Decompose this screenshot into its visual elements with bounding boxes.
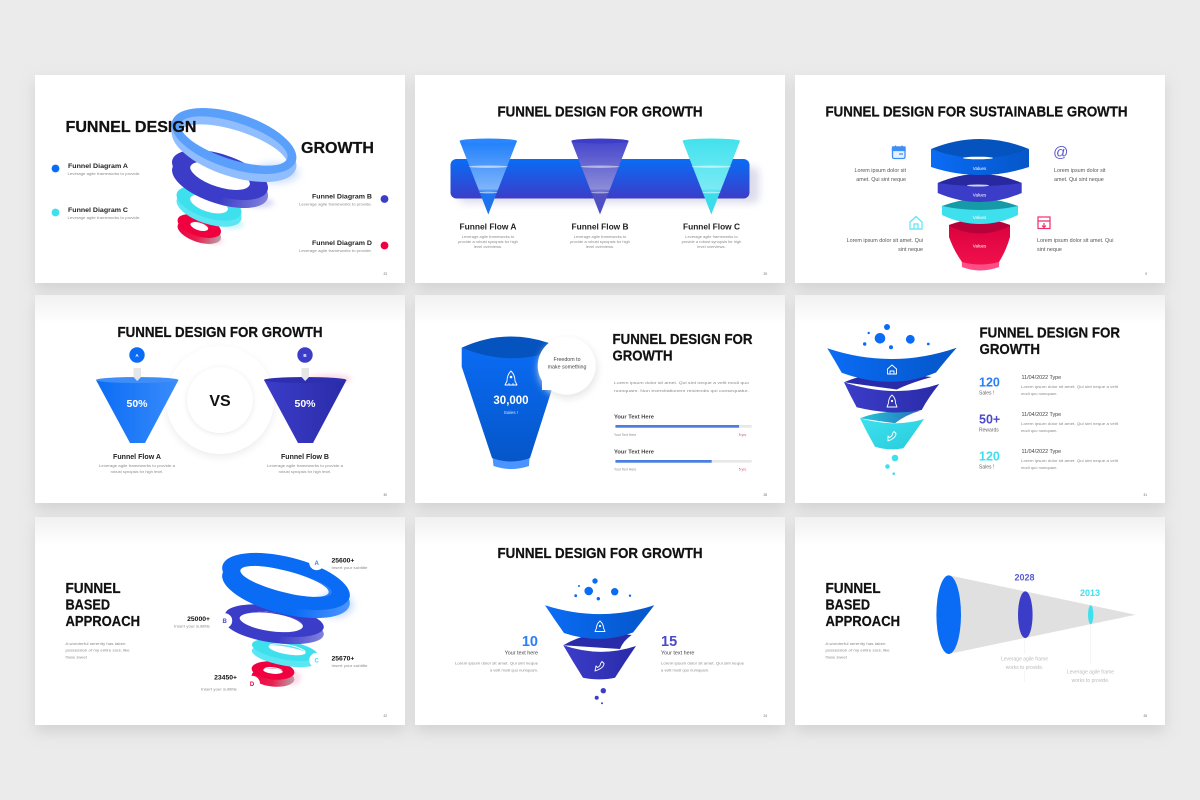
text: top right: amet. Qui sint neque — [1054, 177, 1104, 183]
label: 23450+: 23450+ — [214, 675, 237, 682]
heading: GROWTH — [980, 341, 1040, 358]
paragraph: possession of my entire soul, like — [826, 648, 890, 653]
stat detail 1: 11/04/2022 Type — [1022, 375, 1061, 381]
stat: 120 sales: 120 — [979, 376, 1000, 390]
label: 25670+ — [332, 655, 368, 668]
label: Funnel Flow C: provide a robust synopsis for high — [682, 239, 741, 244]
legend: Funnel Diagram D: Leverage agile frameworks to provide. — [299, 248, 372, 253]
paragraph: these sweet — [826, 654, 848, 659]
panel: three cones on a bar — [415, 75, 785, 283]
heading: GROWTH — [612, 348, 672, 364]
label: Funnel Flow B: robust synopsis for high level. — [279, 469, 331, 474]
stat detail 3: Lorem ipsum dolor sit amet. Qui sint neque a velit — [1021, 458, 1119, 463]
badge B: B — [223, 619, 228, 625]
stat: 120 sales cyan: 120 — [979, 449, 1000, 463]
stat detail 2: modi quo numquam. — [1021, 428, 1057, 433]
ring: cyan — [171, 179, 247, 234]
label: Funnel Flow C: Funnel Flow C — [683, 222, 740, 232]
page number: 29 — [763, 272, 767, 276]
stat: 15: 15 — [661, 634, 677, 650]
label: Funnel Flow C — [682, 222, 741, 249]
paragraph — [66, 641, 130, 659]
stat detail 1: Lorem ipsum dolor sit amet. Qui sint neque a velit — [1021, 384, 1119, 389]
stat: 10: 10 — [522, 634, 538, 650]
label: 25600+: 25600+ — [332, 558, 354, 565]
stat: 50+ rewards: Rewards — [979, 428, 999, 434]
label: 25000+: 25000+ — [187, 616, 210, 623]
stat detail 2: Lorem ipsum dolor sit amet. Qui sint neque a velit — [1021, 421, 1119, 426]
stat detail 3 — [1021, 449, 1119, 470]
falling dots: top — [574, 578, 631, 600]
ring: indigo — [164, 140, 276, 218]
label: Funnel Flow A: Leverage agile frameworks to provide a — [99, 463, 176, 468]
legend: Funnel Diagram A: Funnel Diagram A — [68, 163, 128, 170]
text: bottom right: Lorem ipsum dolor sit amet. Qui — [1037, 238, 1113, 244]
label: Funnel Flow A — [99, 454, 176, 474]
text: bottom left — [847, 238, 923, 253]
label: Funnel Flow B: level overviews. — [586, 244, 614, 249]
funnel tier 3 — [860, 411, 924, 449]
text: bottom left: Lorem ipsum dolor sit amet. Qui — [847, 238, 923, 244]
label: Funnel Flow B: Leverage agile frameworks to provide a — [267, 463, 344, 468]
progress: second: Your Text Here — [614, 468, 636, 472]
paragraph: A wonderful serenity has taken — [826, 641, 886, 646]
legend: Funnel Diagram C: Leverage agile frameworks to provide. — [68, 215, 140, 220]
page number: 28 — [763, 493, 767, 497]
funnel tier 2 — [563, 632, 636, 679]
ellipse: indigo — [1018, 591, 1033, 638]
stat detail 3: 11/04/2022 Type — [1022, 449, 1061, 455]
progress: second — [614, 450, 752, 472]
stat: 120 sales — [979, 376, 1000, 397]
year 2028: 2028 — [1014, 573, 1035, 583]
icon: at sign: @ — [1053, 144, 1068, 161]
label: Funnel Flow A: Leverage agile frameworks to — [462, 234, 515, 239]
funnel with rocket and value — [462, 337, 555, 469]
badge C — [309, 653, 324, 668]
paragraph: A wonderful serenity has taken — [66, 641, 126, 646]
text: bottom right: sint neque — [1037, 247, 1062, 253]
badge A: A — [315, 561, 320, 567]
progress: second: 5 yrs. — [739, 468, 747, 472]
panel: horizontal cone timeline — [795, 517, 1165, 725]
paragraph: Lorem ipsum dolor sit amet. Qui sint neque a velit modi quo — [614, 380, 750, 385]
cone A — [460, 138, 517, 214]
label: Funnel Flow A: Funnel Flow A — [460, 222, 517, 232]
progress: first: Your Text Here — [614, 433, 636, 437]
speech bubble: Freedom to — [553, 357, 581, 363]
heading — [980, 324, 1120, 358]
stage 4: red — [949, 219, 1010, 270]
panel: two-tier funnel — [415, 517, 785, 725]
label: 23450+: Insert your subtitle — [201, 686, 238, 692]
stat: 10: a velit modi quo numquam. — [490, 667, 538, 672]
stat detail 1: modi quo numquam. — [1021, 391, 1057, 396]
panel: single funnel with progress bars — [415, 295, 785, 503]
stat detail 1 — [1021, 375, 1119, 396]
label: Funnel Flow A: level overviews. — [474, 244, 502, 249]
badge A — [309, 555, 324, 570]
stage 2: indigo — [938, 174, 1022, 202]
legend: Funnel Diagram B: Funnel Diagram B — [312, 194, 372, 200]
funnel tier 1 — [545, 605, 654, 639]
progress: first: Your Text Here — [614, 414, 654, 420]
label: Funnel Flow A: provide a robust synopsis for high — [458, 239, 518, 244]
stage 3: cyan — [942, 199, 1018, 224]
VS circles — [166, 346, 274, 457]
funnel with rocket and value: Sales ! — [504, 410, 518, 416]
label: 25670+: 25670+ — [332, 655, 354, 662]
legend: Funnel Diagram B — [299, 194, 388, 206]
label: Funnel Flow B — [570, 222, 630, 249]
progress: second: Your Text Here — [614, 450, 654, 456]
falling dots: top — [863, 324, 930, 349]
ring C cyan — [249, 635, 321, 671]
label: Funnel Flow B: Leverage agile frameworks to — [574, 234, 627, 239]
stat: 15: Your text here — [661, 651, 694, 657]
year 2013: 2013 — [1080, 588, 1100, 598]
label: 23450+ — [201, 675, 238, 692]
paragraph: possession of my entire soul, like — [66, 648, 130, 653]
stat: 50+ rewards: 50+ — [979, 412, 1000, 426]
text: top right: Lorem ipsum dolor sit — [1054, 168, 1106, 174]
funnel A: 50% — [126, 398, 148, 410]
funnel A — [96, 377, 178, 443]
page number: 24 — [763, 714, 767, 718]
heading part one: FUNNEL DESIGN — [66, 119, 196, 136]
legend: Funnel Diagram A — [52, 163, 140, 176]
background shadows under slides — [35, 80, 1165, 732]
speech bubble — [538, 337, 597, 398]
heading — [826, 580, 900, 630]
label: 25000+ — [174, 616, 211, 628]
stat: 120 sales cyan — [979, 449, 1000, 470]
panel: three-tier funnel with stats — [795, 295, 1165, 503]
heading part two: GROWTH — [301, 140, 374, 157]
panel: four-stage sustainable funnel — [795, 75, 1165, 283]
funnel with rocket and value: 30,000 — [493, 395, 529, 407]
progress: first — [614, 414, 752, 437]
text: top left: amet. Qui sint neque — [856, 177, 906, 183]
heading: APPROACH — [66, 613, 140, 630]
note: 2028: works to provide. — [1006, 665, 1043, 671]
text: bottom left: sint neque — [898, 247, 923, 253]
label: Funnel Flow C: level overviews. — [697, 244, 726, 249]
paragraph: numquam. Non exercitationem reiciendis qui consequatur. — [614, 388, 749, 393]
label: Funnel Flow B: Funnel Flow B — [572, 222, 629, 232]
heading: BASED — [826, 596, 870, 613]
text: top left: Lorem ipsum dolor sit — [854, 168, 907, 174]
note: 2028: Leverage agile frame — [1001, 657, 1048, 663]
stat detail 2 — [1021, 412, 1119, 433]
badge D: D — [250, 682, 255, 688]
page number: 22 — [383, 714, 387, 718]
note: 2013: Leverage agile frame — [1067, 670, 1114, 676]
stage 4: red: Values — [973, 244, 987, 248]
page number: 31 — [1143, 493, 1147, 497]
ring A blue — [215, 542, 357, 629]
icon: house — [910, 216, 922, 229]
icon: calendar — [892, 146, 905, 158]
badge D — [244, 676, 260, 692]
grey cone — [949, 575, 1136, 654]
page number: 9 — [1145, 272, 1147, 276]
page number: 30 — [383, 493, 387, 497]
label: Funnel Flow B: provide a robust synopsis for high — [570, 239, 630, 244]
heading: FUNNEL DESIGN FOR GROWTH — [118, 324, 322, 341]
heading: FUNNEL — [66, 580, 120, 597]
label: 25670+: Insert your subtitle — [332, 663, 368, 668]
note: 2013: works to provide. — [1072, 678, 1109, 684]
stage 1: blue — [931, 139, 1029, 175]
badge A with pointer: A — [135, 353, 139, 358]
badge C: C — [315, 659, 320, 665]
stage 3: cyan: Values — [973, 215, 987, 220]
falling dots: bottom — [885, 455, 898, 475]
progress: first: 5 yrs. — [739, 433, 747, 437]
paragraph — [614, 380, 750, 393]
icon: box — [1038, 217, 1050, 228]
stat: 50+ rewards — [979, 412, 1000, 434]
stage 2: indigo: Values — [973, 192, 987, 198]
stat: 10 — [455, 634, 539, 672]
label: 25600+ — [332, 558, 368, 570]
heading: FUNNEL DESIGN FOR — [612, 331, 753, 348]
note: 2013 — [1067, 670, 1114, 684]
note: 2028 — [995, 654, 1055, 671]
paragraph: these sweet — [66, 654, 88, 659]
legend: Funnel Diagram C: Funnel Diagram C — [68, 207, 128, 214]
stat: 120 sales cyan: Sales ! — [979, 464, 994, 470]
paragraph — [826, 641, 890, 659]
stat detail 2: 11/04/2022 Type — [1022, 412, 1061, 418]
stage 1: blue: Values — [973, 166, 987, 171]
cone B — [571, 138, 629, 214]
speech bubble: make something — [548, 364, 586, 370]
text: top left — [854, 168, 907, 183]
text: top right — [1054, 168, 1106, 183]
VS circles: VS — [209, 393, 231, 410]
legend: Funnel Diagram D — [299, 240, 388, 253]
heading: FUNNEL DESIGN FOR GROWTH — [498, 545, 702, 562]
heading: APPROACH — [826, 613, 900, 630]
ring B indigo — [222, 599, 327, 650]
heading: BASED — [66, 596, 110, 613]
legend: Funnel Diagram B: Leverage agile frameworks to provide. — [299, 202, 372, 206]
ring: light blue — [161, 95, 307, 195]
heading: FUNNEL DESIGN FOR SUSTAINABLE GROWTH — [826, 104, 1128, 120]
label: Funnel Flow B — [267, 454, 344, 474]
panel: ring funnel approach — [35, 517, 405, 725]
panel: versus comparison — [35, 295, 405, 503]
heading: FUNNEL DESIGN FOR GROWTH — [498, 104, 702, 120]
panel: ring funnel with four diagrams — [35, 75, 405, 283]
heading — [66, 580, 140, 630]
page number: 26 — [1143, 714, 1147, 718]
legend: Funnel Diagram D: Funnel Diagram D — [312, 240, 372, 247]
ellipse: blue — [936, 575, 961, 654]
stat: 15: a velit modi quo numquam. — [661, 667, 709, 672]
heading: FUNNEL DESIGN FOR — [980, 324, 1120, 341]
label: Funnel Flow C: Leverage agile frameworks to — [685, 234, 739, 239]
heading: FUNNEL — [826, 580, 880, 597]
ellipse: cyan — [1088, 605, 1093, 624]
stat: 15: Lorem ipsum dolor sit amet. Qui sint neque — [661, 660, 745, 666]
heading — [612, 331, 753, 364]
legend: Funnel Diagram C — [52, 207, 140, 220]
stat: 10: Lorem ipsum dolor sit amet. Qui sint neque — [455, 660, 539, 666]
badge B — [217, 613, 232, 628]
badge A with pointer — [129, 347, 145, 381]
badge B with pointer: B — [303, 353, 307, 358]
horizontal bar — [450, 159, 750, 198]
stat: 15 — [661, 634, 745, 672]
falling dots: bottom — [595, 688, 606, 704]
ring D red — [250, 659, 296, 689]
stat: 10: Your text here — [505, 651, 538, 657]
funnel B — [264, 374, 352, 443]
label: Funnel Flow B: Funnel Flow B — [281, 454, 329, 461]
label: 25600+: Insert your subtitle — [332, 565, 368, 570]
legend: Funnel Diagram A: Leverage agile frameworks to provide. — [68, 171, 140, 176]
label: Funnel Flow A — [458, 222, 518, 249]
stat detail 3: modi quo numquam. — [1021, 465, 1057, 470]
funnel B: 50% — [294, 398, 316, 410]
text: bottom right — [1037, 238, 1113, 253]
label: Funnel Flow A: Funnel Flow A — [113, 454, 161, 461]
badge B with pointer — [297, 347, 313, 381]
funnel tier 2 — [844, 373, 939, 412]
label: 25000+: Insert your subtitle — [174, 624, 211, 628]
page number: 23 — [383, 272, 387, 276]
ring: red — [173, 209, 226, 249]
cone C — [683, 138, 740, 214]
stat: 120 sales: Sales ! — [979, 391, 994, 397]
funnel tier 1 — [827, 348, 957, 382]
label: Funnel Flow A: robust synopsis for high level. — [111, 469, 163, 474]
